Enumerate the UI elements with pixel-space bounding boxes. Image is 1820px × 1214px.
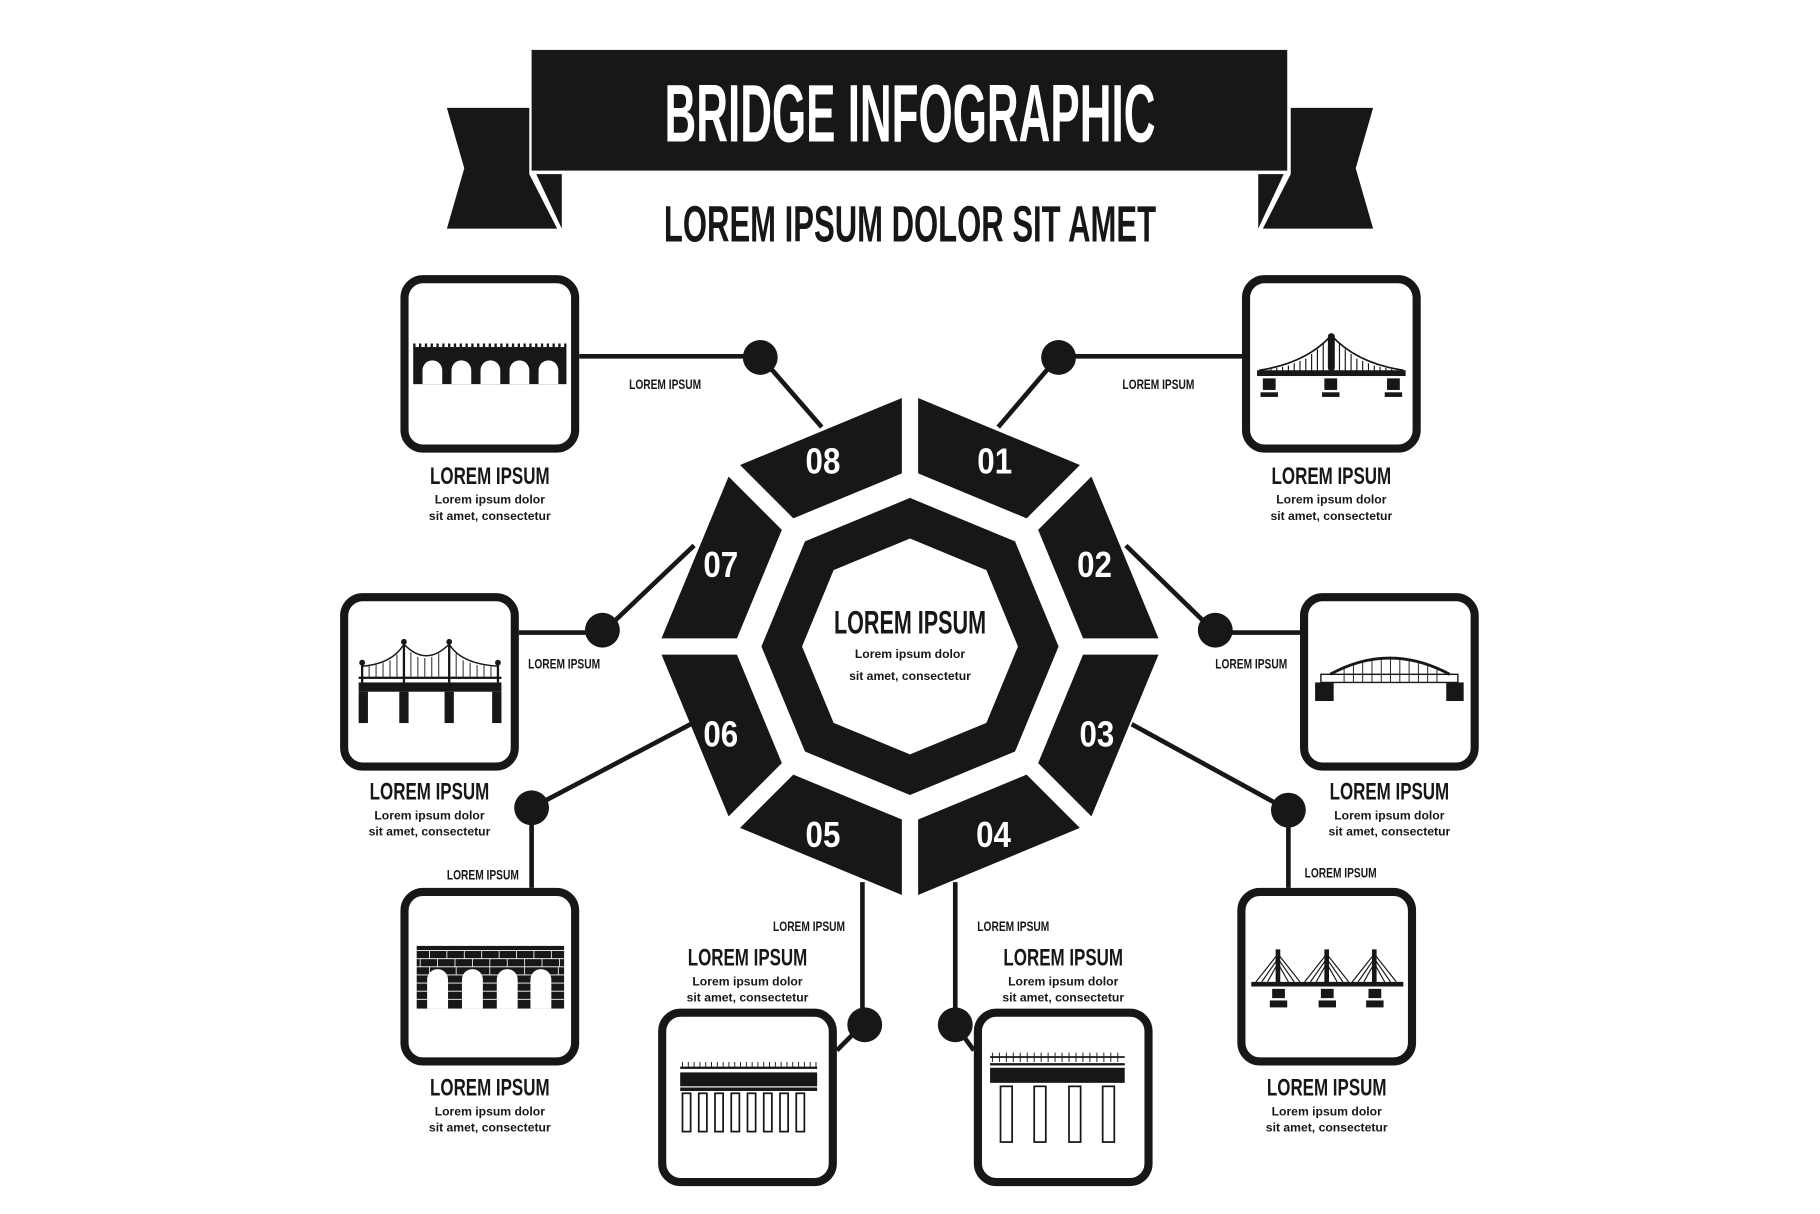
caption TL: sit amet, consectetur [429,509,551,523]
caption BML: LOREM IPSUM [688,945,807,972]
small labels: LOREM IPSUM [528,656,600,672]
icon: cable-stayed bridge [1251,949,1403,1007]
caption MR: Lorem ipsum dolor [1334,808,1445,822]
caption TR [1270,463,1392,523]
small labels: LOREM IPSUM [629,376,701,392]
icon boxes [344,279,1475,1182]
caption BL: Lorem ipsum dolor [435,1104,545,1118]
caption TR: LOREM IPSUM [1272,463,1391,490]
small labels: LOREM IPSUM [977,918,1049,934]
icon: stone arch bridge [413,344,566,384]
caption ML: sit amet, consectetur [369,825,491,839]
segment numbers: 05 [806,814,840,855]
caption TR: sit amet, consectetur [1270,509,1392,523]
caption BL: LOREM IPSUM [430,1075,550,1102]
center text [834,605,986,683]
caption BMR [1002,945,1124,1005]
caption BR: Lorem ipsum dolor [1272,1104,1382,1118]
caption BR [1266,1075,1388,1135]
caption BMR: Lorem ipsum dolor [1008,974,1119,988]
small labels [447,376,1377,934]
caption ML [369,779,491,839]
octagon diagram [635,371,1185,922]
center ring [761,498,1059,795]
connector dots [514,340,1306,1042]
small labels: LOREM IPSUM [447,867,519,883]
segment numbers: 07 [703,544,738,585]
subtitle: LOREM IPSUM DOLOR SIT AMET [664,195,1156,252]
icon: brick arch bridge [417,946,564,1009]
captions [369,463,1451,1135]
icon: beam bridge with railing [990,1053,1125,1142]
segment numbers: 03 [1079,713,1114,754]
caption ML: Lorem ipsum dolor [374,808,485,822]
segment numbers: 01 [977,441,1012,482]
segment numbers [703,441,1114,855]
segment numbers: 06 [703,713,738,754]
small labels: LOREM IPSUM [1215,656,1287,672]
caption BML: Lorem ipsum dolor [692,974,803,988]
center text: sit amet, consectetur [849,669,971,683]
caption MR: LOREM IPSUM [1330,779,1449,806]
small labels: LOREM IPSUM [1305,864,1377,880]
caption BMR: sit amet, consectetur [1002,991,1124,1005]
caption MR [1328,779,1451,839]
title: BRIDGE INFOGRAPHIC [665,69,1155,160]
caption BR: sit amet, consectetur [1266,1121,1388,1135]
caption TL: Lorem ipsum dolor [435,493,545,507]
caption BMR: LOREM IPSUM [1003,945,1123,972]
caption BML: sit amet, consectetur [687,991,809,1005]
caption TL [429,463,551,523]
caption TR: Lorem ipsum dolor [1276,493,1387,507]
caption BR: LOREM IPSUM [1267,1075,1386,1102]
segment numbers: 04 [976,814,1011,855]
small labels: LOREM IPSUM [773,918,845,934]
icon: double suspension bridge [359,639,501,723]
icon: arch bridge [1315,658,1464,701]
caption BML [687,945,809,1005]
icon: suspension bridge [1257,333,1406,397]
caption MR: sit amet, consectetur [1328,825,1451,839]
caption BL [429,1075,551,1135]
segment numbers: 08 [806,441,840,482]
center text: Lorem ipsum dolor [855,647,965,661]
icon: viaduct with many piers [680,1062,817,1132]
caption ML: LOREM IPSUM [370,779,489,806]
title banner [447,50,1373,229]
small labels: LOREM IPSUM [1122,376,1194,392]
connectors [519,356,1300,1050]
caption TL: LOREM IPSUM [430,463,550,490]
segment numbers: 02 [1077,544,1112,585]
caption BL: sit amet, consectetur [429,1121,551,1135]
center text: LOREM IPSUM [834,605,986,641]
